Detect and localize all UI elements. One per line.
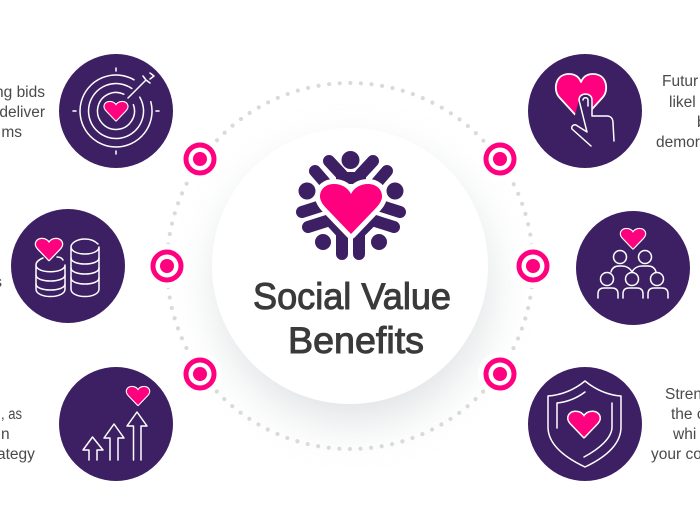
text block: upper right: likel — [669, 94, 696, 111]
text block: lower left — [0, 406, 35, 463]
connector target: middle right — [511, 244, 555, 288]
text block: lower left: , as — [1, 406, 22, 423]
central white circle — [212, 128, 488, 404]
panel: rising arrows icon badge — [59, 367, 173, 481]
text block: lower left: n — [1, 426, 10, 443]
panel: coins icon badge — [11, 209, 125, 323]
title: Social Value — [253, 276, 451, 317]
title — [253, 276, 451, 361]
dotted orbit ring — [167, 83, 533, 449]
connector target: upper left — [178, 137, 222, 181]
text block: upper right: Futur — [662, 73, 698, 90]
title: Benefits — [288, 320, 424, 361]
connector target: upper right — [478, 137, 522, 181]
text block: upper left: deliver — [0, 104, 45, 121]
panel: target icon badge — [59, 54, 173, 168]
panel: shield icon badge — [528, 367, 642, 481]
text block: upper left: ms — [1, 124, 22, 141]
text block: lower right — [651, 386, 700, 463]
text block: lower right: whi — [672, 426, 696, 443]
text block: upper left — [0, 84, 45, 141]
text block: upper right — [656, 73, 700, 151]
connector target: lower left — [178, 352, 222, 396]
connector target: middle left — [145, 244, 189, 288]
panel: hand and heart icon badge — [528, 54, 642, 168]
panel: people icon badge — [576, 211, 690, 325]
central logo: people around heart — [298, 151, 404, 254]
connector target: lower right — [478, 352, 522, 396]
central circle shadow — [219, 152, 487, 420]
text block: upper right: demor — [656, 134, 700, 151]
